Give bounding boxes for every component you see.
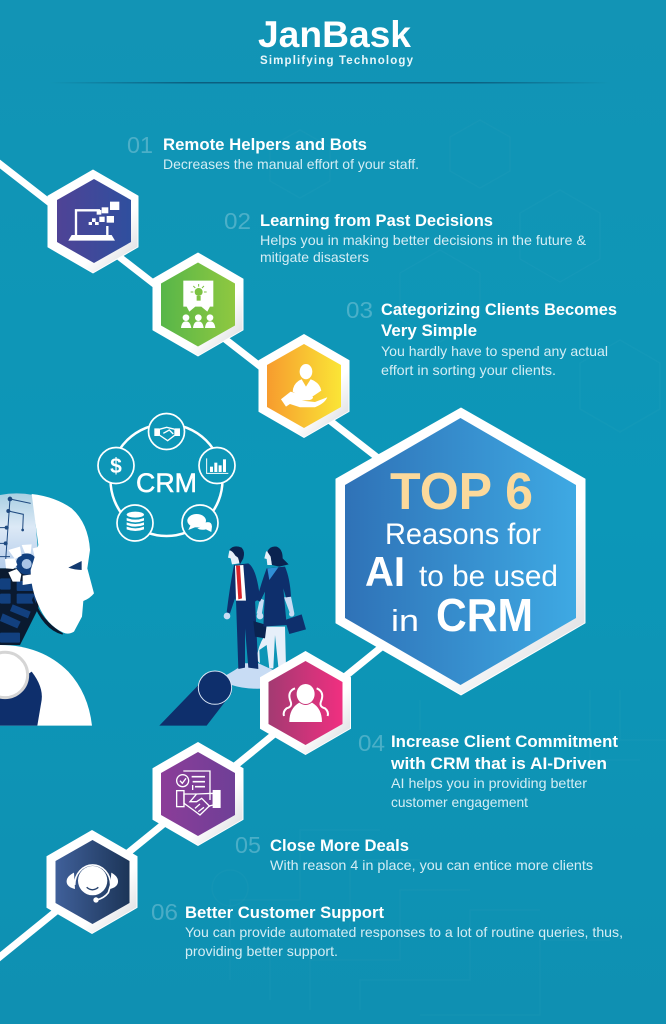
reason 02 text xyxy=(224,208,587,265)
reason 03 text: Very Simple xyxy=(381,322,477,340)
reason 06 text: Better Customer Support xyxy=(185,904,384,922)
reason 03 text xyxy=(346,297,617,378)
reason 05 text: Close More Deals xyxy=(270,837,409,855)
connector line: lower diagonal xyxy=(0,645,384,960)
hexagon 2: learning from decisions icon xyxy=(153,253,243,356)
reason 04 text: 04 xyxy=(358,730,385,756)
reason 03 text: You hardly have to spend any actual xyxy=(381,343,608,359)
header divider xyxy=(50,82,610,84)
reason 04 text: with CRM that is AI-Driven xyxy=(390,755,607,773)
reason 02 text: Learning from Past Decisions xyxy=(260,212,493,230)
CRM cycle diagram: $ xyxy=(110,455,122,478)
reason 06 text: providing better support. xyxy=(185,943,338,959)
reason 02 text: Helps you in making better decisions in the future & xyxy=(260,232,587,248)
CRM cycle diagram: CRM xyxy=(136,468,197,498)
reason 05 text: 05 xyxy=(235,832,261,858)
hexagon 4: client commitment icon xyxy=(260,652,350,754)
reason 02 text: 02 xyxy=(224,208,251,234)
central hexagon: title: CRM xyxy=(436,589,533,641)
business people illustration xyxy=(224,546,306,669)
reason 06 text xyxy=(151,899,623,959)
logo: JanBask: Simplifying Technology xyxy=(260,55,414,67)
reason 01 text xyxy=(127,132,419,172)
central hexagon: title: to be used xyxy=(419,560,558,593)
reason 01 text: Decreases the manual effort of your staff. xyxy=(163,156,419,172)
robot head illustration xyxy=(0,493,94,726)
central hexagon: title: Reasons for xyxy=(385,518,541,551)
connector line: upper diagonal xyxy=(0,161,378,458)
hexagon 6: customer support icon xyxy=(47,830,137,934)
central hexagon: title: in xyxy=(391,603,419,638)
robot arm xyxy=(159,663,277,726)
central hexagon: title: AI xyxy=(365,548,405,595)
reason 01 text: 01 xyxy=(127,132,153,158)
reason 01 text: Remote Helpers and Bots xyxy=(163,136,367,154)
reason 03 text: 03 xyxy=(346,297,373,323)
hexagon 5: close more deals icon xyxy=(153,742,243,846)
reason 03 text: Categorizing Clients Becomes xyxy=(381,301,617,319)
reason 06 text: You can provide automated responses to a lot of routine queries, thus, xyxy=(185,924,623,940)
reason 05 text: With reason 4 in place, you can entice more clients xyxy=(270,857,593,873)
central hexagon: title: TOP 6 xyxy=(390,463,533,521)
hexagon 1: remote helpers icon xyxy=(48,170,138,273)
reason 05 text xyxy=(235,832,593,873)
hexagon 3: categorizing clients icon xyxy=(259,334,349,438)
CRM cycle diagram xyxy=(98,414,235,541)
reason 02 text: mitigate disasters xyxy=(260,249,369,265)
reason 03 text: effort in sorting your clients. xyxy=(381,362,556,378)
reason 04 text xyxy=(358,730,619,810)
reason 04 text: customer engagement xyxy=(391,794,528,810)
reason 04 text: Increase Client Commitment xyxy=(391,733,619,751)
reason 04 text: AI helps you in providing better xyxy=(391,775,587,791)
reason 06 text: 06 xyxy=(151,899,178,925)
logo: JanBask: JanBask xyxy=(258,14,411,55)
central hexagon: title xyxy=(336,408,585,695)
